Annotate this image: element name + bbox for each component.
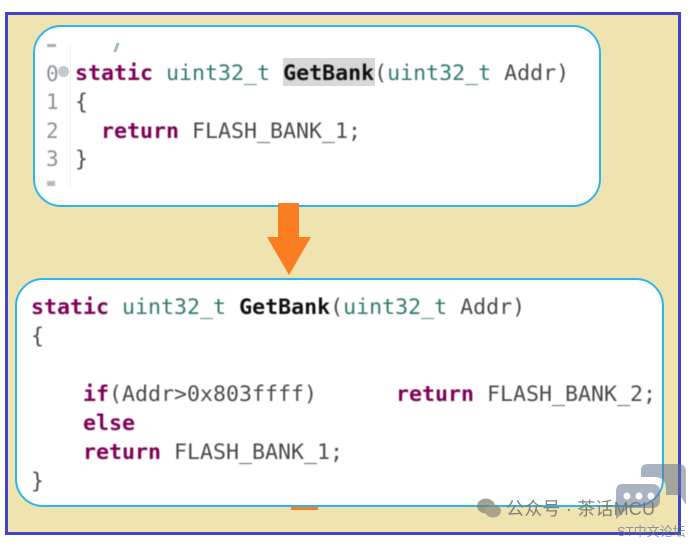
fold icon	[58, 66, 69, 77]
watermark: forum logo	[616, 464, 686, 519]
line number 1: 1	[46, 90, 59, 114]
panel: original code	[33, 25, 601, 207]
cropped line number below	[47, 181, 55, 186]
line: return bank 1: return FLASH_BANK_1;	[83, 440, 343, 465]
line number 0: 0	[46, 62, 59, 86]
line: signature: static uint32_t GetBank(uint32_t Addr)	[75, 61, 569, 86]
line: close brace: }	[75, 147, 88, 172]
line: open brace: {	[75, 90, 88, 115]
line number 2: 2	[46, 119, 59, 143]
watermark: wechat icon	[477, 498, 501, 518]
code block: modified GetBank	[31, 295, 656, 494]
highlight behind GetBank	[283, 58, 375, 86]
watermark: forum name: ST中文论坛	[617, 524, 686, 539]
code block: original GetBank	[46, 43, 569, 188]
arrow: down	[267, 203, 311, 275]
orange sliver below panel	[291, 505, 318, 510]
cropped comment end	[113, 43, 120, 52]
line: return: return FLASH_BANK_1;	[101, 119, 361, 144]
line: if: if(Addr>0x803ffff)	[83, 382, 317, 407]
line: open brace: {	[31, 324, 44, 349]
watermark: account name: 公众号 · 茶话MCU	[506, 499, 655, 519]
line: return bank 2: return FLASH_BANK_2;	[396, 382, 656, 407]
line number gutter divider	[70, 44, 71, 188]
cropped line number above	[47, 44, 56, 47]
line: close brace: }	[31, 469, 44, 494]
line: else: else	[83, 411, 135, 436]
line: signature: static uint32_t GetBank(uint32_t Addr)	[31, 295, 525, 320]
line number 3: 3	[46, 147, 59, 171]
panel: modified code	[15, 278, 664, 507]
